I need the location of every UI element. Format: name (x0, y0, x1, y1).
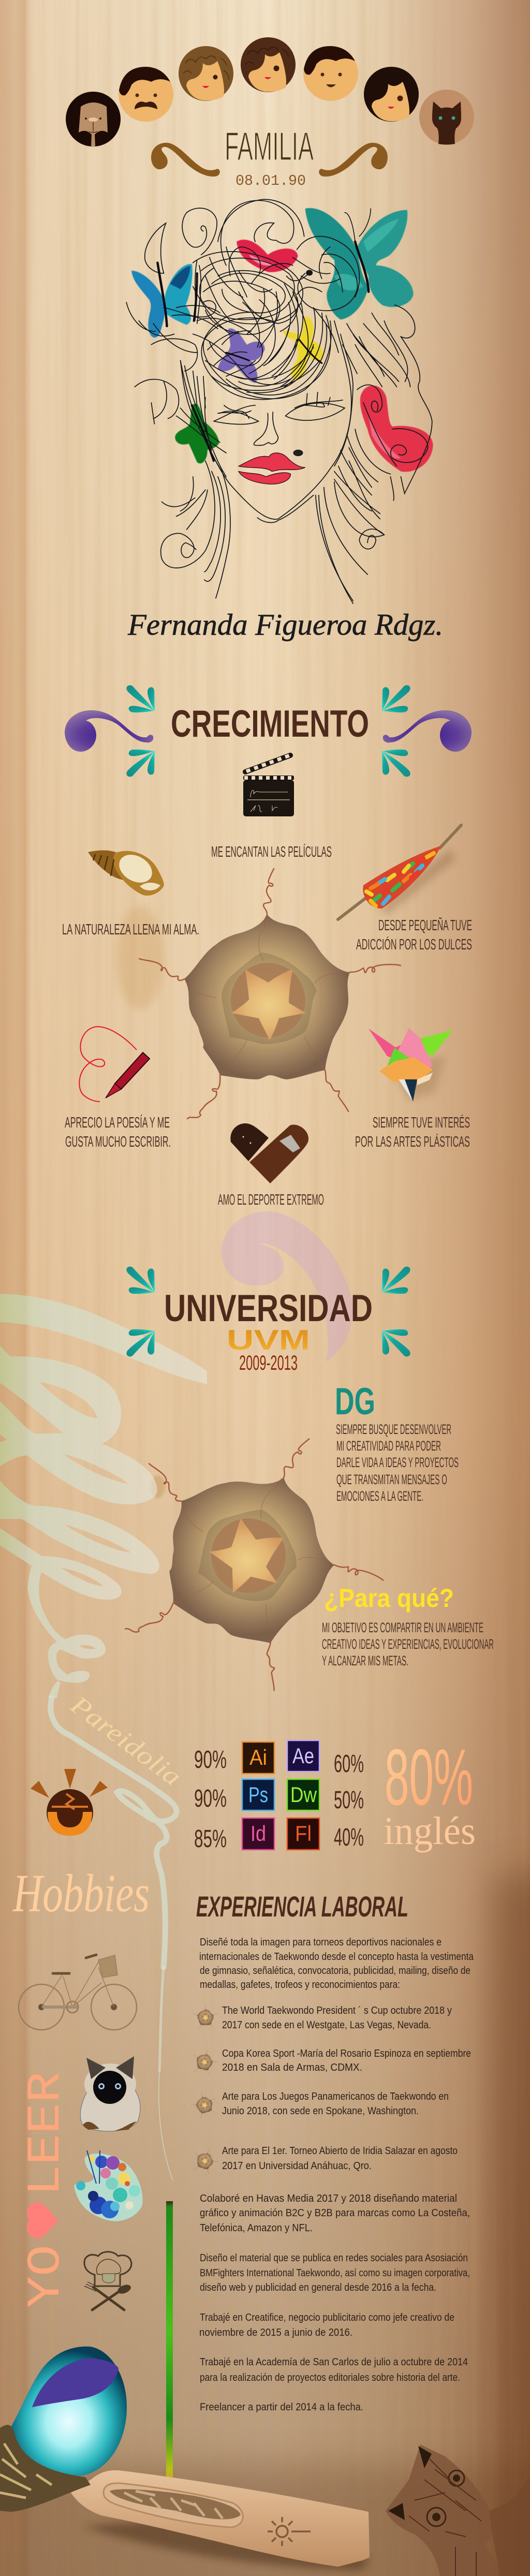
text block: objective: Y ALCANZAR MIS METAS. (322, 1653, 408, 1668)
list item 4 (189, 2144, 458, 2176)
face: cat (419, 90, 474, 145)
face: black hair woman (364, 67, 419, 122)
word LEER: LEER (20, 2072, 73, 2196)
paragraph: BMFighters: BMFighters International Taekwondo, así como su imagen corporativa, (200, 2267, 470, 2279)
script label: Pareidolia: Pareidolia (65, 1689, 187, 1791)
list item 2: Copa Korea Sport -María del Rosario Espinoza en septiembre (222, 2048, 471, 2059)
intro paragraph: medallas, gafetes, trofeos y reconocimientos para: (200, 1979, 400, 1990)
icon: eye with rays (31, 1769, 108, 1836)
paragraph: Havas Media: Colaboré en Havas Media 2017 y 2018 diseñando material (200, 2193, 457, 2204)
caption: poetry: APRECIO LA POESÍA Y ME (65, 1114, 170, 1131)
percent labels left: 90% (194, 1785, 227, 1812)
script heading: Hobbies: Hobbies (12, 1864, 150, 1923)
text block: objective (322, 1620, 494, 1668)
caption: films: ME ENCANTAN LAS PELÍCULAS (211, 843, 332, 860)
paragraph: BMFighters: Diseño el material que se publica en redes sociales para Asosiación (200, 2252, 468, 2264)
hand holding orb (0, 2425, 91, 2512)
caption: sweets (356, 916, 472, 953)
caption: arts (355, 1114, 470, 1150)
portrait illustration: woman with butterflies (126, 199, 433, 604)
caption: poetry: GUSTA MUCHO ESCRIBIR. (65, 1134, 171, 1150)
icon: heart thread and pen (79, 1027, 150, 1102)
background lettering: ghost script (0, 1294, 207, 1698)
icon: After Effects (287, 1740, 319, 1772)
paragraph: Creatifice: noviembre de 2015 a junio de 2016. (199, 2327, 352, 2338)
caption: sport: AMO EL DEPORTE EXTREMO (218, 1192, 324, 1208)
butterfly: blue (131, 264, 193, 338)
vertical text: I love reading (20, 2072, 73, 2308)
family faces row (66, 37, 474, 147)
hair and face linework (126, 199, 432, 604)
list item 3: Junio 2018, con sede en Spokane, Washington. (222, 2105, 419, 2117)
percent labels left: 85% (194, 1825, 227, 1853)
list item 3: Arte para Los Juegos Panamericanos de Taekwondo en (222, 2091, 449, 2102)
icon: Photoshop: Ps (248, 1782, 268, 1807)
icon: Photoshop (242, 1779, 274, 1810)
intro paragraph (199, 1937, 474, 1990)
face: dog (66, 92, 121, 147)
icon: clapperboard (243, 755, 294, 816)
illustration: squirrel sketch (386, 2445, 530, 2576)
list item 4: Arte para El 1er. Torneo Abierto de Iridia Salazar en agosto (222, 2145, 458, 2157)
paragraph: Havas Media (200, 2193, 470, 2234)
paragraph: Creatifice: Trabajé en Creatifice, negocio publicitario como jefe creativo de (200, 2312, 454, 2323)
intro paragraph: Diseñé toda la imagen para torneos deportivos nacionales e (200, 1937, 441, 1948)
icon: heart (27, 2202, 58, 2238)
percent labels right: 60% (334, 1750, 364, 1778)
butterfly: red right (360, 386, 433, 472)
butterfly: green (175, 404, 219, 463)
label: inglés (384, 1809, 476, 1853)
butterfly: red top (237, 240, 298, 272)
paragraph: BMFighters (200, 2252, 470, 2293)
paragraph: Creatifice (199, 2312, 454, 2338)
signature: Fernanda Figueroa Rdgz. (127, 608, 443, 641)
years: 2009-2013 (239, 1352, 298, 1374)
icon: Illustrator: Ai (249, 1745, 267, 1769)
face: curly brown hair woman (179, 46, 233, 101)
background shape: lilac swirl (222, 1211, 353, 1362)
list item 1: 2017 con sede en el Westgate, Las Vegas, Nevada. (222, 2019, 431, 2031)
ornament: teal petals (126, 685, 410, 777)
butterfly bodies (157, 209, 371, 461)
icon: candy stick (338, 825, 461, 919)
heading: DG: DG (335, 1381, 375, 1423)
heading: UNIVERSIDAD (164, 1287, 373, 1329)
icon: origami paper figure (369, 1028, 453, 1102)
icon: After Effects: Ae (292, 1744, 314, 1768)
ornament: right brown swirl (319, 143, 388, 177)
icon: Flash: Fl (295, 1821, 312, 1846)
icon: Dreamweaver: Dw (290, 1782, 317, 1807)
icon: paint palette (74, 2150, 143, 2221)
face: dark curly hair woman (241, 37, 296, 92)
percent labels left (194, 1746, 227, 1853)
face: father with moustache (119, 67, 173, 122)
caption: nature: LA NATURALEZA LLENA MI ALMA. (62, 921, 199, 938)
section: Crecimiento header (65, 685, 472, 777)
paragraph: Academia de San Carlos: para la realización de proyectos editoriales sobre historia del arte. (200, 2372, 460, 2383)
icon: bicycle (19, 1955, 137, 2030)
ornament: left brown swirl (151, 143, 220, 177)
lips (239, 453, 305, 484)
icon: skateboard heart (230, 1123, 308, 1183)
paragraph: freelance: Freelancer a partir del 2014 a la fecha. (200, 2402, 363, 2413)
ornament: teal petals (126, 1267, 410, 1356)
ornament: purple swirl right (383, 710, 472, 752)
text block: DG description (336, 1422, 459, 1504)
software skills (194, 1740, 364, 1853)
icon: siamese cat (80, 2056, 140, 2131)
birth date: 08.01.90 (235, 172, 306, 189)
list item 3 (188, 2089, 449, 2120)
beauty mark (293, 450, 303, 456)
text block: work experience (188, 1937, 474, 2413)
butterfly: yellow (282, 317, 323, 380)
list item 4: 2017 en Universidad Anáhuac, Qro. (222, 2160, 372, 2172)
list item 2 (189, 2046, 471, 2077)
icon: InDesign (242, 1818, 274, 1850)
intro paragraph: internacionales de Taekwondo desde el concepto hasta la vestimenta (199, 1951, 474, 1963)
intro paragraph: de gimnasio, señalética, convocatoria, publicidad, mailing, diseño de (200, 1965, 470, 1977)
butterfly: teal (305, 208, 414, 319)
UVM logo text: UVM (227, 1324, 310, 1356)
icon: chef hat and cutlery (84, 2252, 132, 2310)
percent labels right: 50% (334, 1787, 364, 1814)
incense stick (166, 2201, 173, 2491)
section: Universidad header (126, 1267, 410, 1374)
percent labels right (334, 1750, 364, 1851)
icon: sea shell (88, 849, 164, 896)
incense holder (71, 2470, 370, 2570)
orb purple cap (32, 2358, 119, 2407)
paragraph: Academia de San Carlos (200, 2357, 468, 2383)
ornament: purple swirl left (65, 710, 153, 752)
icon: Illustrator (242, 1742, 274, 1774)
face: boy (303, 46, 358, 101)
caption: poetry (65, 1114, 171, 1150)
icon: InDesign: Id (251, 1821, 266, 1846)
paragraph: BMFighters: diseño web y publicidad en general desde 2016 a la fecha. (200, 2282, 436, 2293)
paragraph: Academia de San Carlos: Trabajé en la Academía de San Carlos de julio a octubre de 2014 (200, 2357, 468, 2368)
heading: para qué: ¿Para qué? (324, 1584, 454, 1613)
ornament: thin flowing line (51, 1698, 176, 2179)
stat: english level (384, 1733, 476, 1853)
icon: Dreamweaver (287, 1779, 319, 1810)
text block: DG description: EMOCIONES A LA GENTE. (336, 1488, 423, 1504)
percent labels left: 90% (194, 1746, 227, 1774)
percent labels right: 40% (334, 1824, 364, 1851)
glass orb (10, 2347, 127, 2477)
list item 1 (193, 2004, 452, 2031)
central flower with tendrils (139, 869, 401, 1119)
word YO: YO (20, 2245, 73, 2308)
butterfly: purple (218, 328, 264, 383)
second flower with tendrils (82, 1382, 424, 1719)
icon: Flash (287, 1818, 319, 1850)
paragraph: Havas Media: Telefónica, Amazon y NFL. (200, 2222, 313, 2234)
title: Familia: FAMILIA (225, 124, 314, 169)
list item 1: The World Taekwondo President ´ s Cup octubre 2018 y (222, 2005, 452, 2016)
heading: CRECIMIENTO (171, 703, 369, 745)
list item 2: 2018 en Sala de Armas, CDMX. (222, 2062, 362, 2073)
paragraph: Havas Media: gráfico y animación B2C y B2B para marcas como La Costeña, (200, 2207, 470, 2219)
